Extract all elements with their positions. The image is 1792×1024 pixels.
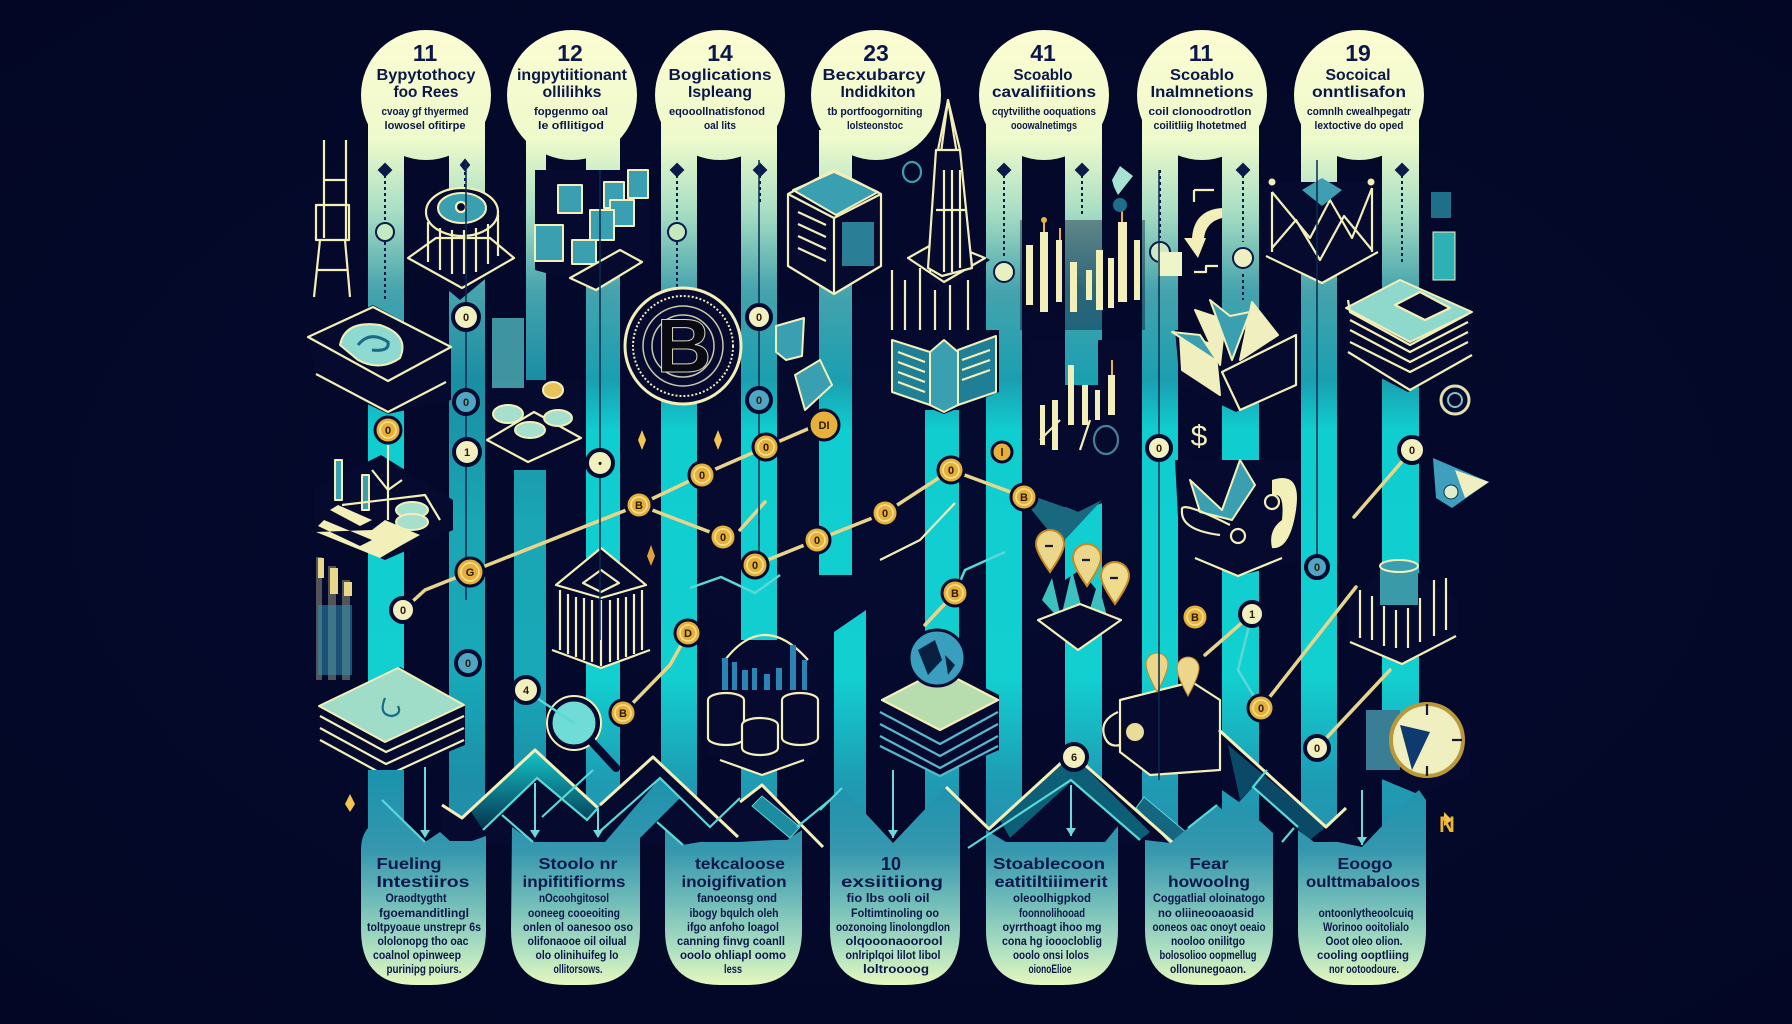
icon: tall pin tents <box>1035 570 1122 650</box>
bottom panel 4: olqooonaoorool <box>846 936 942 948</box>
coin <box>747 388 771 412</box>
icon: bitcoin coin: B <box>657 304 711 389</box>
coin: 0 <box>385 425 391 437</box>
coin <box>456 558 484 586</box>
coin <box>513 677 539 703</box>
small side sparkles: N <box>1439 812 1455 837</box>
column 2 top text: ollilihks <box>542 84 602 101</box>
dashed pointers and rings on the legs <box>376 160 1408 300</box>
coin <box>1305 736 1329 760</box>
bottom panel 1: fgoemanditlingl <box>379 908 469 920</box>
coin: D <box>684 628 692 640</box>
column 2 top text: le ofllitigod <box>538 120 604 132</box>
coin <box>872 500 898 526</box>
icon: small card <box>776 318 804 360</box>
coin <box>1306 556 1328 578</box>
bottom panel 6: nooloo onilitgo <box>1171 936 1245 948</box>
coin <box>375 417 401 443</box>
bottom panel 4: onlriplqoi lilot libol <box>846 950 940 962</box>
bottom panel 7: Worinoo ooitolialo <box>1323 922 1409 934</box>
coin <box>587 450 613 476</box>
bottom panel 5: Stoablecoon <box>993 856 1105 873</box>
bottom panel 1: Intestiiros <box>376 874 470 891</box>
bottom panel 2: ooneeg cooeoiting <box>528 908 620 920</box>
bottom panel 3: fanoeonsg ond <box>697 893 777 905</box>
column 4 top text: tb portfoogorniting <box>828 106 922 118</box>
icon: hand with flying notes <box>1175 460 1300 576</box>
coin <box>456 651 480 675</box>
column 1 top text: Bypytothocy <box>376 67 476 84</box>
column 1 top text: cvoay gf thyermed <box>382 106 468 118</box>
coin <box>1147 436 1171 460</box>
coin: 0 <box>463 397 469 409</box>
column 6 banner <box>1137 30 1267 830</box>
coin <box>1399 437 1425 463</box>
bottom panel 2: onlen ol oanesoo oso <box>523 922 633 934</box>
icon: jar and pictogram <box>1431 192 1455 280</box>
icon: ring coin top right <box>1441 386 1469 414</box>
icon: lotus wallet <box>1172 300 1299 412</box>
bottom panel 4: 10 <box>881 854 901 874</box>
bottom panel 5 <box>986 826 1118 985</box>
column 3 top text: Boglications <box>668 67 772 84</box>
coin: 0 <box>752 560 758 572</box>
column 3 top text: Ispleang <box>688 84 752 101</box>
coin: 1 <box>1249 609 1255 621</box>
icon: stairs with chart <box>315 445 453 560</box>
bottom panel 2: olo olinihuifeg lo <box>536 950 618 962</box>
icon: dollar sign: $ <box>1191 420 1208 453</box>
column 1 banner <box>361 30 491 830</box>
column 5 banner <box>979 30 1109 830</box>
coin: 0 <box>1409 445 1415 457</box>
coin: 0 <box>814 535 820 547</box>
column 4 top text <box>822 40 926 132</box>
coin: G <box>466 567 474 579</box>
column 6 top text <box>1148 40 1254 132</box>
bottom panel 1: ololonopg tho oac <box>378 936 469 948</box>
icon: coin stack platform <box>487 318 581 462</box>
bottom panel 2: inpifitifiorms <box>522 874 626 891</box>
coin <box>747 305 771 329</box>
column 2 top text <box>517 40 628 132</box>
bottom panel 5: eatitiltiiimerit <box>994 874 1108 891</box>
bottom panel 7: nor ootoodoure. <box>1329 964 1399 976</box>
icon: wallet with pins <box>1103 653 1220 775</box>
bottom panel 1: Fueling <box>376 856 442 873</box>
bottom panel 4: loltroooog <box>863 964 929 976</box>
bottom panel 1: Oraodtygtht <box>386 893 447 905</box>
coin: 0 <box>882 508 888 520</box>
column 7 top text <box>1307 40 1412 132</box>
icon: pictogram bars left <box>316 557 352 680</box>
bottom panel 4 <box>830 787 960 985</box>
connector chains <box>403 160 1412 780</box>
coin: 0 <box>1156 443 1162 455</box>
bottom panel 3: ibogy bqulch oleh <box>690 908 778 920</box>
drop arrows into panels <box>420 767 1367 845</box>
icon: skyscraper <box>900 100 990 292</box>
icon: wallet stack <box>319 667 465 778</box>
bottom panel 4: fio lbs ooli oil <box>846 893 930 905</box>
icon: magnifier <box>547 696 616 768</box>
column 6 top text: Scoablo <box>1170 67 1234 84</box>
coin <box>689 462 715 488</box>
coin <box>675 620 701 646</box>
column 6 top text: 11 <box>1189 40 1213 66</box>
bottom panel 7: Eoogo <box>1338 856 1393 873</box>
dark chevron masks below the zigzag <box>440 733 1363 847</box>
coin: 0 <box>756 312 762 324</box>
bottom panel 7: oulttmabaloos <box>1306 874 1420 891</box>
bottom panel 6 <box>1145 802 1273 985</box>
coin <box>942 580 968 606</box>
bottom panel 1 <box>361 770 486 985</box>
column 2 top text: ingpytiitionant <box>517 67 628 84</box>
coin: DI <box>818 420 830 432</box>
coin: 1 <box>464 447 470 459</box>
icon: zigzag chart <box>1264 178 1378 283</box>
icon: coin stacks with chart <box>708 635 818 775</box>
bottom panel 3: ifgo anfoho loagol <box>687 922 779 934</box>
bottom panel 1: coalnol opinweep <box>373 950 461 962</box>
bottom panel 5: cona hg iooocloblig <box>1002 936 1102 948</box>
bottom panel 2: olifonaooe oil oilual <box>528 936 626 948</box>
bottom panel 2 <box>511 778 680 985</box>
icon: server cube <box>788 170 881 294</box>
icon: tray with swirl <box>308 305 451 414</box>
bottom panel 3: ooolo ohliapl oomo <box>680 950 786 962</box>
coin <box>454 439 480 465</box>
coin <box>804 527 830 553</box>
column 4 banner <box>811 30 959 830</box>
icon: candlestick skyline <box>1020 210 1145 330</box>
coin: B <box>1020 492 1028 504</box>
coin <box>1248 695 1274 721</box>
bottom panel 6: bolosolioo oopmellug <box>1160 950 1256 962</box>
bottom panel 5: oionoElioe <box>1028 964 1072 976</box>
coin: B <box>619 708 627 720</box>
icon: map pins <box>1036 530 1129 604</box>
icon: bitcoin coin <box>625 288 741 404</box>
bottom panel 3: canning finvg coanll <box>677 936 785 948</box>
column 1 top text: lowosel ofitirpe <box>384 120 466 132</box>
bottom panel 7: ontoonlytheoolcuiq <box>1318 908 1414 920</box>
chevron gradient bands <box>470 745 1326 843</box>
coin <box>753 434 779 460</box>
bottom panel 5: oleoolhigpkod <box>1013 893 1091 905</box>
column 4 top text: 23 <box>863 40 889 66</box>
bottom panel 1: toltpyoaue unstrepr 6s <box>367 922 481 934</box>
coin: 0 <box>756 395 762 407</box>
column 6 top text: coilitliig lhotetmed <box>1154 120 1246 132</box>
small side sparkles <box>345 430 1455 837</box>
icon: isometric stacked cylinder <box>1348 560 1457 664</box>
coin: B <box>635 500 643 512</box>
icon: temple vault <box>406 188 514 300</box>
icon: shield bubble <box>1433 458 1489 508</box>
coin <box>1182 604 1208 630</box>
coin: 0 <box>699 470 705 482</box>
bottom panel 4: exsiitiiong <box>841 874 943 891</box>
column 7 top text: Socoical <box>1326 67 1390 84</box>
bottom panel 6: Fear <box>1190 856 1228 873</box>
bottom panel 3: less <box>724 964 742 976</box>
coin <box>742 552 768 578</box>
column 4 top text: lolsteonstoc <box>847 120 903 132</box>
bottom panel 2: nOcoohgitosol <box>539 893 609 905</box>
coin on the chevron peak: 6 <box>1071 752 1077 764</box>
column 3 top text: 14 <box>707 40 733 66</box>
bottom panel 2: Stoolo nr <box>538 856 618 873</box>
icon: easel tower <box>314 140 350 297</box>
icon: book stack <box>1346 280 1472 392</box>
bottom panel 5: oyrrthoagt ihoo mg <box>1002 922 1102 934</box>
bottom panel 6: howoolng <box>1168 874 1250 891</box>
column 2 top text: fopgenmo oal <box>534 106 608 118</box>
icon: clock with tubs <box>1360 704 1470 795</box>
column 5 top text: 41 <box>1030 40 1056 66</box>
coin <box>1240 602 1264 626</box>
icon: server block <box>552 547 650 668</box>
column 7 top text: onntlisafon <box>1312 84 1406 101</box>
coin: 0 <box>763 442 769 454</box>
icon: globe on money stack <box>880 630 999 776</box>
bottom panel 4: Foltimtinoling oo <box>851 908 939 920</box>
bottom panel 7 <box>1298 790 1426 985</box>
coin: 0 <box>948 465 954 477</box>
coin: 0 <box>1314 562 1320 574</box>
bottom panel 2: ollitorsows. <box>554 964 602 976</box>
coin <box>710 524 736 550</box>
column 5 top text <box>992 40 1096 132</box>
coin: 0 <box>1314 743 1320 755</box>
column 7 top text: comnlh cwealhpegatr <box>1307 106 1412 118</box>
zigzag trend lines <box>382 730 1346 848</box>
column 1 top text <box>376 40 476 132</box>
coin: B <box>951 588 959 600</box>
coin <box>391 598 415 622</box>
coin <box>938 457 964 483</box>
coin: l <box>1000 447 1004 459</box>
coin <box>454 390 478 414</box>
bottom panel 6: no oliineooaoasid <box>1158 908 1254 920</box>
bottom panel 6: ollonunegoaon. <box>1170 964 1246 976</box>
column 4 top text: Indidkiton <box>840 84 916 101</box>
coin <box>610 700 636 726</box>
column 2 top text: 12 <box>557 40 583 66</box>
column 2 banner <box>507 30 637 830</box>
column 4 top text: Becxubarcy <box>822 67 926 84</box>
column 7 top text: lextoctive do oped <box>1314 120 1404 132</box>
coin <box>626 492 652 518</box>
icon: curved arrow <box>1158 190 1222 276</box>
coin: B <box>1191 612 1199 624</box>
bottom panel 3 <box>665 830 802 985</box>
column 5 top text: Scoablo <box>1014 67 1073 84</box>
bottom panel 7: cooling ooptliing <box>1317 950 1409 962</box>
icon: circle glyph <box>903 162 921 182</box>
column 5 top text: ooowalnetimgs <box>1011 120 1077 132</box>
coin: 4 <box>523 685 530 697</box>
coin: 0 <box>720 532 726 544</box>
icon: star shard <box>1112 166 1133 212</box>
column 3 top text: eqooollnatisfonod <box>669 106 765 118</box>
column 7 top text: 19 <box>1345 40 1371 66</box>
coin markers <box>375 304 1425 760</box>
column 6 top text: Inalmnetions <box>1150 84 1254 101</box>
coin: 0 <box>465 658 471 670</box>
coin on the chevron peak <box>1061 744 1087 770</box>
bottom panel 5: foonnolihooad <box>1019 908 1085 920</box>
coin <box>1011 484 1037 510</box>
column 6 top text: coil clonoodrotlon <box>1148 106 1252 118</box>
bottom panel 1: purinipg poiurs. <box>386 964 462 976</box>
column 5 top text: cavalifiitions <box>992 84 1096 101</box>
bottom panel 4: oozonoing linolongdlon <box>836 922 950 934</box>
coin <box>453 304 479 330</box>
bottom panel 3: inoigifivation <box>682 874 786 891</box>
bottom panel 5: ooolo onsi lolos <box>1013 950 1089 962</box>
bottom panel 3: tekcaloose <box>695 856 785 873</box>
icon: box with coin <box>795 360 832 410</box>
column 7 banner <box>1294 30 1424 830</box>
column 1 top text: 11 <box>413 40 437 66</box>
bottom panel 7: Ooot oleo olion. <box>1326 936 1402 948</box>
column 3 top text <box>668 40 772 132</box>
bottom panel 6: ooneos oac onoyt oeaio <box>1152 922 1266 934</box>
icon: floating documents <box>535 170 650 290</box>
coin: 0 <box>463 312 469 324</box>
column 5 top text: cqytvilithe ooquations <box>992 106 1096 118</box>
coin: • <box>598 458 602 470</box>
coin: 0 <box>1258 703 1264 715</box>
coin <box>809 410 839 440</box>
column 3 top text: oal lits <box>704 120 736 132</box>
coin: 0 <box>400 605 406 617</box>
icon: city chart box <box>888 268 999 414</box>
icon: candle chart with dark shield <box>1022 340 1137 545</box>
bottom panel 6: Coggatlial oloinatogo <box>1153 893 1265 905</box>
coin <box>992 442 1012 462</box>
column 3 banner <box>655 30 785 830</box>
column 1 top text: foo Rees <box>394 84 459 101</box>
